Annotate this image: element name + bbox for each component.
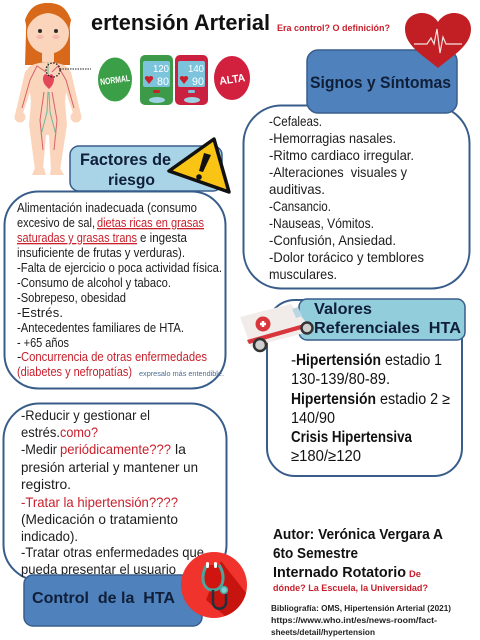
panel: reference values: Hipertensión	[296, 352, 381, 369]
icon: alta badge: ALTA	[219, 72, 246, 88]
panel: control: -Medir	[21, 441, 57, 457]
panel: control: -Tratar otras enfermedades que	[21, 544, 204, 560]
text block: author: Internado Rotatorio	[273, 564, 406, 581]
panel: risk factors: excesivo de sal,	[17, 215, 95, 230]
panel: signs and symptoms: -Cansancio.	[269, 198, 331, 214]
text block: author: De	[409, 569, 421, 579]
title: ertensión Arterial	[91, 10, 270, 35]
icon: green blood pressure monitor	[140, 55, 173, 105]
heading: factores de riesgo	[70, 146, 222, 191]
panel: signs and symptoms: musculares.	[269, 266, 337, 282]
panel: signs and symptoms: -Alteraciones visuales y	[269, 164, 407, 180]
panel: signs and symptoms: -Dolor torácico y temblores	[269, 249, 424, 265]
icon: red blood pressure monitor	[175, 55, 208, 105]
panel: reference values: 130-139/80-89.	[291, 371, 390, 388]
panel: control: -Reducir y gestionar el	[21, 407, 150, 423]
title: Era control? O definición?	[277, 23, 390, 34]
icon: heart with pulse	[405, 13, 471, 68]
heading: valores referenciales	[299, 299, 465, 340]
panel: reference values: 140/90	[291, 410, 335, 427]
panel: reference values: Crisis Hipertensiva	[291, 429, 412, 446]
panel: risk factors: (diabetes y nefropatías)	[17, 364, 132, 379]
panel: risk factors: - +65 años	[17, 335, 69, 350]
panel: control: estrés.	[21, 424, 60, 440]
panel: control: como?	[60, 424, 98, 440]
heading: valores referenciales: Referenciales HTA	[314, 320, 461, 337]
panel: control: la	[175, 441, 186, 457]
panel: control: registro.	[21, 476, 71, 492]
text block: bibliography: https://www.who.int/es/news-room/fact-	[271, 615, 437, 625]
panel: signs and symptoms: -Cefaleas.	[269, 113, 322, 129]
panel: control	[4, 404, 226, 580]
panel: risk factors	[4, 192, 226, 388]
panel: risk factors: -Estrés.	[17, 305, 63, 320]
panel: signs and symptoms: -Ritmo cardiaco irregular.	[269, 147, 414, 163]
icon: red blood pressure monitor: 90	[192, 76, 204, 88]
icon: alta badge	[214, 56, 250, 100]
panel: risk factors: -	[17, 349, 21, 364]
panel: signs and symptoms: auditivas.	[269, 181, 325, 197]
icon: normal badge: NORMAL	[99, 73, 131, 87]
panel: reference values	[267, 300, 462, 476]
panel: risk factors: saturadas y grasas trans	[17, 230, 137, 245]
panel: reference values: ≥180/≥120	[291, 448, 361, 465]
panel: risk factors: e ingesta	[140, 230, 188, 245]
text block: bibliography: sheets/detail/hypertension	[271, 627, 375, 637]
text block: bibliography	[271, 603, 451, 637]
title	[91, 10, 390, 35]
text block: author: dónde? La Escuela, la Universidad?	[273, 583, 428, 593]
panel: control: -Tratar la hipertensión????	[21, 494, 178, 510]
text block: author: Autor: Verónica Vergara A	[273, 526, 443, 543]
icon: normal badge	[98, 58, 132, 102]
panel: control: indicado).	[21, 528, 78, 544]
text block: bibliography: Bibliografía: OMS, Hipertensión Arterial (2021)	[271, 603, 451, 613]
heading: control de la HTA	[24, 575, 202, 626]
text block: author	[273, 526, 443, 593]
panel: signs and symptoms: -Hemorragias nasales.	[269, 130, 396, 146]
panel: control: pueda presentar el usuario	[21, 561, 176, 577]
panel: control: presión arterial y mantener un	[21, 459, 198, 475]
icon: woman with circulatory system	[14, 3, 91, 175]
panel: control: (Medicación o tratamiento	[21, 511, 178, 527]
heading: factores de riesgo: Factores de	[80, 151, 171, 169]
heading: signos y sintomas: Signos y Síntomas	[310, 74, 451, 92]
panel: risk factors: Concurrencia de otras enfermedades	[21, 349, 207, 364]
icon: ambulance	[240, 304, 312, 351]
icon: green blood pressure monitor: 120	[153, 64, 169, 75]
heading: valores referenciales: Valores	[314, 301, 372, 318]
panel: reference values: estadio 2 ≥	[380, 391, 450, 408]
panel: control: periódicamente???	[60, 441, 171, 457]
panel: risk factors: Alimentación inadecuada (consumo	[17, 200, 197, 215]
panel: reference values: estadio 1	[385, 352, 442, 369]
panel: reference values: Hipertensión	[291, 391, 376, 408]
panel: signs and symptoms: -Nauseas, Vómitos.	[269, 215, 374, 231]
icon: red blood pressure monitor: 140	[188, 64, 204, 75]
icon: warning triangle	[169, 139, 229, 192]
panel: risk factors: -Antecedentes familiares de HTA.	[17, 320, 184, 335]
panel: signs and symptoms	[244, 106, 470, 288]
text block: author: 6to Semestre	[273, 545, 358, 562]
panel: risk factors: expresalo más entendible.	[139, 371, 224, 378]
panel: risk factors: insuficiente de frutas y verduras).	[17, 245, 185, 260]
panel: risk factors: -Sobrepeso, obesidad	[17, 290, 126, 305]
heading: control de la HTA: Control de la HTA	[32, 590, 175, 607]
heading: factores de riesgo: riesgo	[108, 172, 155, 189]
panel: risk factors: -Consumo de alcohol y tabaco.	[17, 275, 171, 290]
panel: risk factors: -Falta de ejercicio o poca actividad física.	[17, 260, 222, 275]
panel: signs and symptoms: -Confusión, Ansiedad.	[269, 232, 396, 248]
icon: stethoscope	[181, 552, 247, 618]
heading: signos y sintomas	[307, 50, 457, 113]
icon: green blood pressure monitor: 80	[157, 76, 169, 88]
panel: reference values: -	[291, 352, 296, 369]
panel: risk factors: dietas ricas en grasas	[97, 215, 204, 230]
